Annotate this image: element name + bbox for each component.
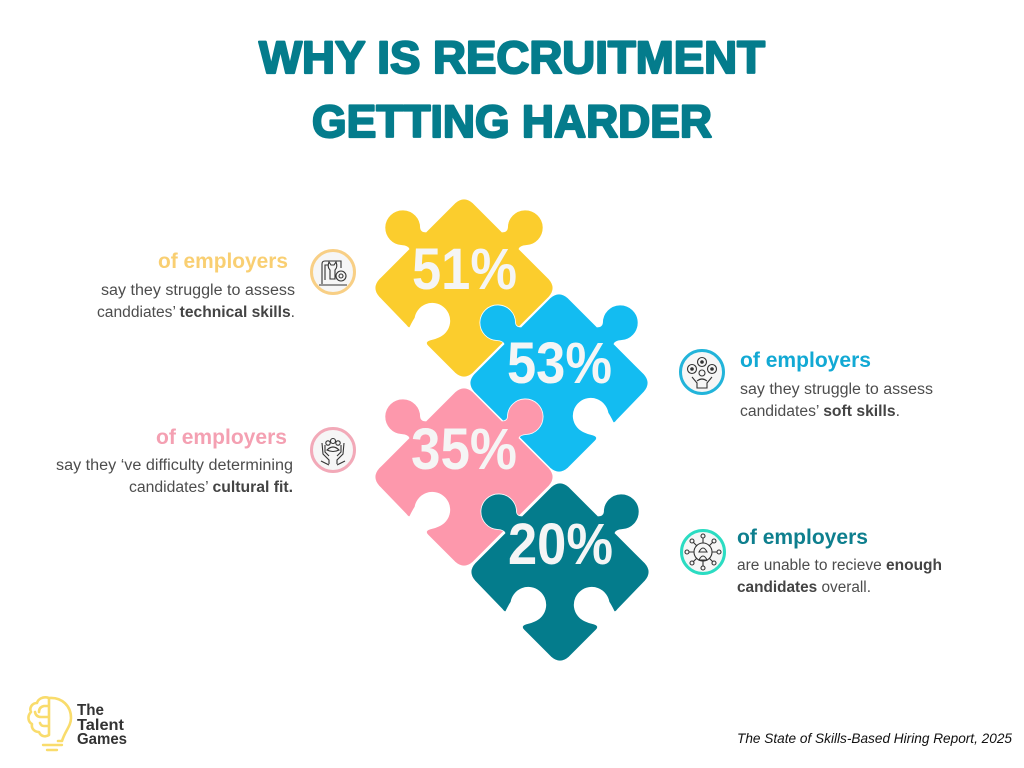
- text: not enough candidates: [737, 526, 942, 596]
- puzzle piece: 20%: 20%: [508, 512, 613, 577]
- puzzle piece: 51%: 51%: [412, 237, 517, 302]
- puzzle piece: 35%: [375, 388, 553, 566]
- text: cultural fit: candidates’ cultural fit.: [129, 479, 293, 496]
- logo: The Talent Games: The: [77, 702, 104, 719]
- logo: The Talent Games: Games: [77, 731, 127, 748]
- text: technical skills: [97, 250, 295, 321]
- text: cultural fit: [56, 426, 293, 496]
- title: GETTING HARDER: [312, 96, 712, 147]
- puzzle piece: 35%: 35%: [411, 417, 517, 482]
- text: not enough candidates: of employers: [737, 526, 868, 549]
- text: technical skills: canddiates’ technical skills.: [97, 304, 295, 321]
- puzzle piece: 53%: 53%: [507, 331, 612, 396]
- text: technical skills: say they struggle to assess: [101, 282, 295, 299]
- text: not enough candidates: are unable to recieve enough: [737, 557, 942, 574]
- source citation: The State of Skills-Based Hiring Report, 2025: [737, 730, 1012, 746]
- icon: candidates network: [682, 530, 724, 574]
- icon: soft skills person juggling: [680, 350, 724, 394]
- title: [259, 32, 765, 147]
- logo: The Talent Games: Talent: [77, 717, 124, 734]
- puzzle piece: 20%: [471, 483, 649, 661]
- text: soft skills: say they struggle to assess: [740, 381, 933, 398]
- puzzle piece: 51%: [375, 199, 553, 377]
- icon: technical skills laptop and wrench: [312, 250, 354, 294]
- icon: cultural fit hands holding people: [312, 428, 354, 472]
- text: technical skills: of employers: [158, 250, 288, 273]
- title: WHY IS RECRUITMENT: [259, 32, 765, 83]
- puzzle piece: 53%: [470, 294, 648, 472]
- text: soft skills: candidates’ soft skills.: [740, 403, 900, 420]
- text: soft skills: [740, 349, 933, 420]
- text: cultural fit: say they ‘ve difficulty determining: [56, 457, 293, 474]
- text: cultural fit: of employers: [156, 426, 287, 449]
- text: soft skills: of employers: [740, 349, 871, 372]
- logo: The Talent Games: [28, 697, 127, 750]
- text: not enough candidates: candidates overall.: [737, 579, 871, 596]
